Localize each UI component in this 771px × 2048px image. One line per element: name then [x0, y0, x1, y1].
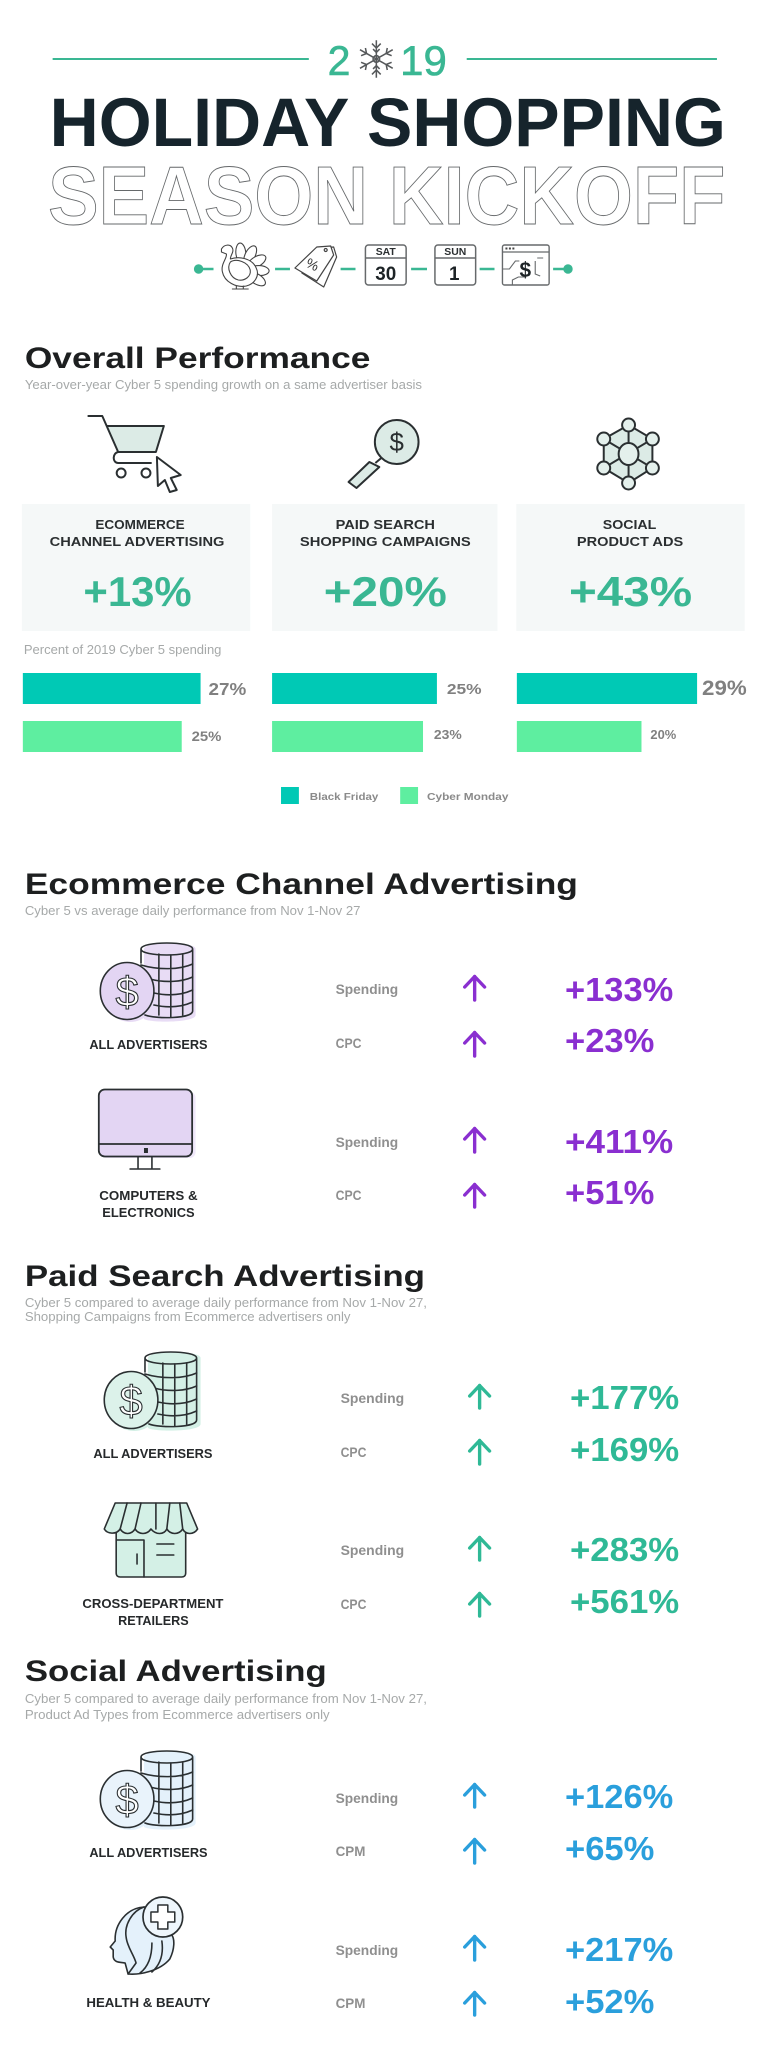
- metric: cpm: [336, 1830, 654, 1867]
- metric: spending: [341, 1379, 679, 1416]
- category label: [99, 1189, 198, 1220]
- icon: network: [597, 418, 659, 490]
- metric: cpc: +51%: [565, 1174, 654, 1211]
- metric: spending: Spending: [341, 1543, 404, 1558]
- subheading: Cyber 5 compared to average daily performance from Nov 1-Nov 27,: [25, 1296, 427, 1310]
- year line with snowflake: 19: [400, 37, 447, 84]
- bar chart: 29%: [702, 677, 747, 700]
- panel: ecommerce channel advertising: [22, 504, 250, 631]
- panel: social product ads: SOCIAL: [603, 517, 656, 532]
- icon: calendar Saturday 30: 30: [375, 264, 396, 285]
- metric: cpc: CPC: [336, 1188, 362, 1203]
- metric: spending: Spending: [336, 1943, 398, 1958]
- category label: CROSS-DEPARTMENT: [82, 1597, 224, 1611]
- panel: ecommerce channel advertising: CHANNEL ADVERTISING: [50, 534, 224, 549]
- chart caption: Percent of 2019 Cyber 5 spending: [24, 643, 222, 657]
- metric: cpm: CPM: [336, 1996, 365, 2011]
- category label: ALL ADVERTISERS: [93, 1447, 213, 1461]
- heading: Paid Search Advertising: [25, 1260, 425, 1293]
- panel: social product ads: [516, 504, 745, 631]
- metric: spending: +411%: [565, 1123, 673, 1160]
- legend: Black Friday: [310, 792, 379, 803]
- metric: spending: +283%: [570, 1531, 679, 1568]
- metric: cpc: +169%: [570, 1431, 679, 1468]
- panel: paid search shopping campaigns: PAID SEARCH: [336, 517, 435, 532]
- icon: magnifier with dollar: $: [390, 429, 404, 457]
- panel: social product ads: +43%: [569, 568, 692, 615]
- category label: ALL ADVERTISERS: [89, 1846, 208, 1860]
- metric: spending: [336, 1123, 673, 1160]
- panel: overall performance: [22, 342, 747, 804]
- metric: spending: Spending: [336, 1135, 398, 1150]
- icon: browser with dollar: $: [519, 259, 531, 282]
- metric: cpc: [336, 1022, 654, 1059]
- heading: Social Advertising: [25, 1655, 327, 1688]
- metric: spending: [341, 1531, 679, 1568]
- header: [48, 37, 726, 289]
- icon: shopping cart: [88, 416, 181, 492]
- metric: spending: +217%: [565, 1931, 673, 1968]
- heading: Ecommerce Channel Advertising: [25, 868, 578, 901]
- metric: spending: Spending: [341, 1391, 404, 1406]
- icon: coins purple: $: [116, 968, 139, 1015]
- subheading: Product Ad Types from Ecommerce advertisers only: [25, 1708, 331, 1722]
- bar chart: 20%: [650, 728, 676, 742]
- panel: ecommerce channel advertising: +13%: [83, 568, 192, 615]
- metric: cpc: CPC: [341, 1445, 367, 1460]
- legend: [281, 787, 509, 804]
- metric: spending: +177%: [570, 1379, 679, 1416]
- metric: cpc: CPC: [336, 1036, 362, 1051]
- panel: paid search shopping campaigns: +20%: [324, 568, 447, 615]
- icon: calendar Saturday 30: [365, 245, 406, 285]
- bar chart: 25%: [192, 728, 222, 744]
- icon: head with health cross: [110, 1897, 183, 1974]
- metric: cpm: +52%: [565, 1983, 654, 2020]
- metric: cpc: +561%: [570, 1583, 679, 1620]
- panel: paid search shopping campaigns: [272, 504, 497, 631]
- legend: Cyber Monday: [427, 792, 509, 803]
- category label: RETAILERS: [118, 1614, 189, 1628]
- metric: spending: +133%: [565, 971, 673, 1008]
- metric: cpc: [341, 1431, 679, 1468]
- category label: ELECTRONICS: [102, 1206, 195, 1220]
- icon: coins green: [104, 1352, 201, 1431]
- subheading: [25, 1692, 427, 1722]
- icon: price tags: [295, 246, 337, 287]
- panel: ecommerce channel advertising: ECOMMERCE: [95, 517, 185, 532]
- panel: paid search shopping campaigns: SHOPPING CAMPAIGNS: [300, 534, 471, 549]
- icon: magnifier with dollar: [349, 420, 419, 488]
- subheading: Year-over-year Cyber 5 spending growth on a same advertiser basis: [25, 378, 422, 392]
- icon: storefront: [104, 1503, 198, 1577]
- panel: paid search advertising section: [25, 1260, 679, 1628]
- heading: Overall Performance: [25, 342, 370, 375]
- panel: social advertising section: [25, 1655, 673, 2020]
- bar chart: 23%: [434, 728, 462, 742]
- subheading: Cyber 5 compared to average daily performance from Nov 1-Nov 27,: [25, 1692, 427, 1706]
- metric: cpm: +65%: [565, 1830, 654, 1867]
- metric: spending: [336, 971, 673, 1008]
- category label: COMPUTERS &: [99, 1189, 198, 1203]
- metric: spending: Spending: [336, 982, 398, 997]
- year line with snowflake: 2: [328, 37, 351, 84]
- metric: spending: [336, 1778, 673, 1815]
- metric: spending: Spending: [336, 1791, 398, 1806]
- subheading: [25, 1296, 427, 1324]
- icon: browser with dollar: [502, 245, 549, 285]
- metric: cpc: +23%: [565, 1022, 654, 1059]
- icon: calendar Saturday 30: SAT: [376, 247, 396, 258]
- icon: price tags: %: [304, 254, 322, 274]
- icon: calendar Sunday 1: [435, 245, 476, 285]
- subheading: Cyber 5 vs average daily performance from Nov 1-Nov 27: [25, 904, 361, 918]
- title line one: HOLIDAY SHOPPING: [50, 84, 726, 161]
- icon: calendar Sunday 1: SUN: [444, 247, 466, 258]
- icon: calendar Sunday 1: 1: [449, 264, 460, 285]
- timeline icons: [195, 243, 571, 289]
- metric: cpc: CPC: [341, 1597, 367, 1612]
- year line with snowflake: [53, 37, 717, 84]
- subheading: Shopping Campaigns from Ecommerce advertisers only: [25, 1310, 351, 1324]
- panel: social product ads: PRODUCT ADS: [577, 534, 684, 549]
- category label: HEALTH & BEAUTY: [86, 1996, 211, 2010]
- metric: spending: +126%: [565, 1778, 673, 1815]
- panel: ecommerce channel advertising section: [25, 868, 673, 1220]
- metric: cpc: [341, 1583, 679, 1620]
- icon: coins purple: [100, 943, 196, 1022]
- icon: coins green: $: [119, 1377, 143, 1424]
- icon: monitor: [99, 1090, 196, 1169]
- category label: ALL ADVERTISERS: [89, 1038, 208, 1052]
- title line two outlined: SEASON KICKOFF: [48, 149, 725, 242]
- metric: cpm: CPM: [336, 1844, 365, 1859]
- bar chart: [23, 673, 747, 752]
- metric: cpm: [336, 1983, 654, 2020]
- bar chart: 27%: [209, 679, 246, 699]
- bar chart: 25%: [447, 681, 482, 698]
- icon: turkey: [221, 243, 269, 289]
- category label: [82, 1597, 224, 1628]
- icon: coins blue: [100, 1751, 196, 1830]
- metric: spending: [336, 1931, 673, 1968]
- metric: cpc: [336, 1174, 654, 1211]
- icon: coins blue: $: [116, 1776, 139, 1823]
